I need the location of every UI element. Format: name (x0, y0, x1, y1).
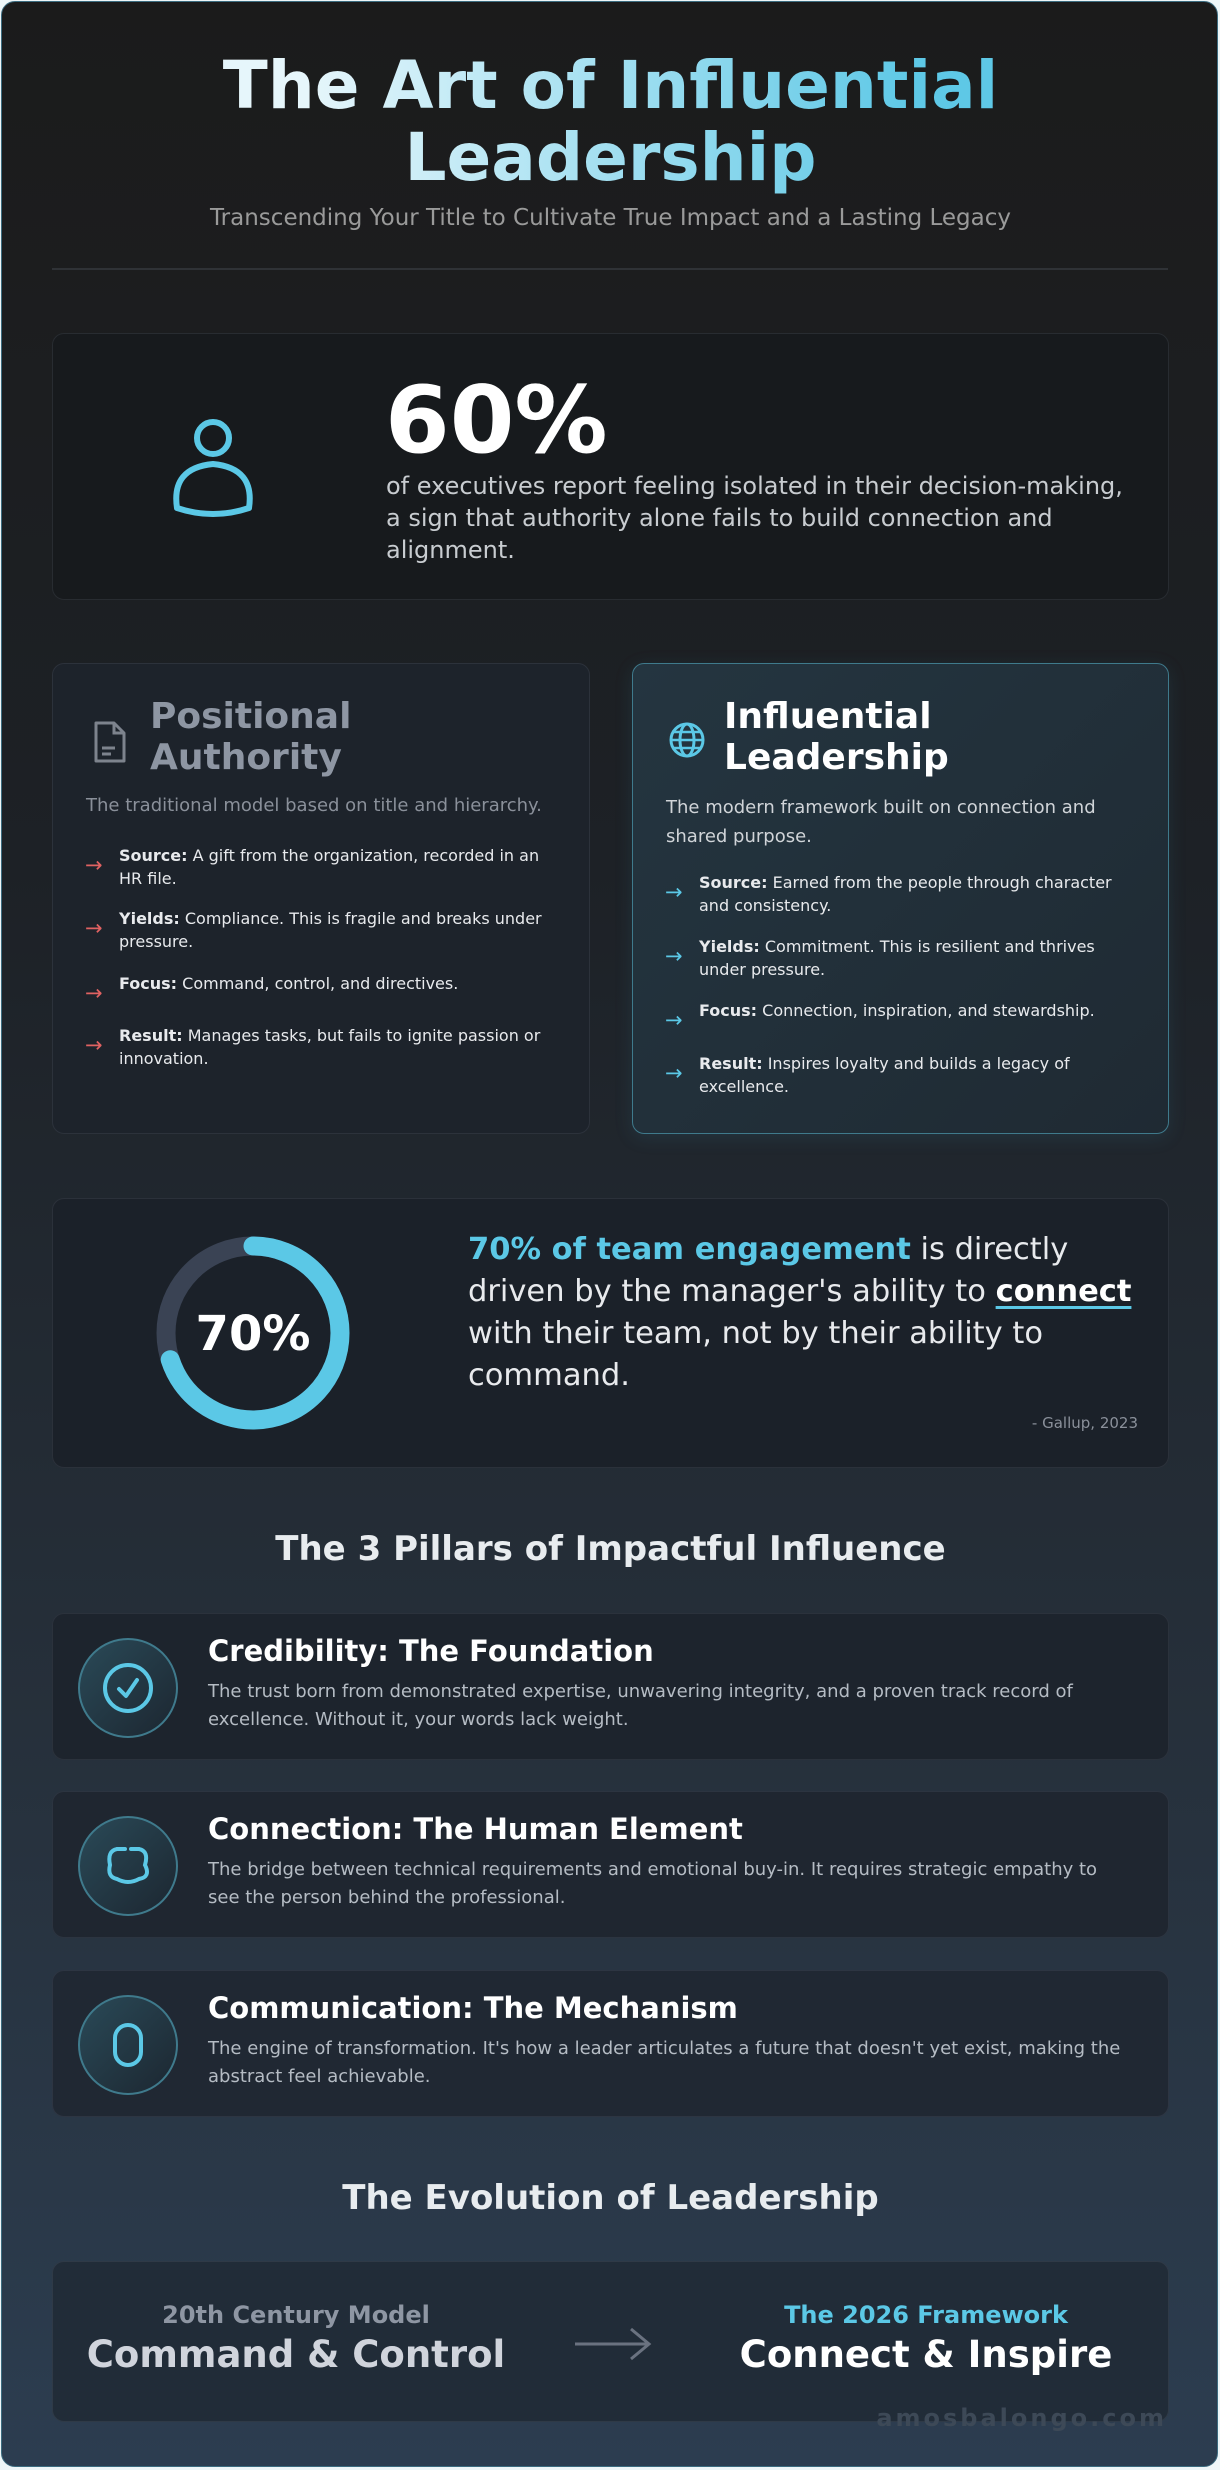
old model (87, 2301, 505, 2376)
bullet list: → (85, 981, 103, 1005)
bullet list: Source: Earned from the people through character and consistency. (699, 873, 1112, 915)
bullet list: Focus: Command, control, and directives. (119, 974, 458, 993)
icon: microphone (78, 1995, 178, 2095)
panel: influential leadership (632, 663, 1169, 1134)
icon: check (78, 1638, 178, 1738)
icon: globe (670, 722, 704, 758)
pillar: credibility (52, 1613, 1169, 1760)
pillar: connection (52, 1791, 1169, 1938)
bullet list: Result: Inspires loyalty and builds a legacy of excellence. (699, 1054, 1070, 1096)
bullet list (85, 846, 542, 1068)
pillar: communication (52, 1970, 1169, 2117)
description: The trust born from demonstrated expertise, unwavering integrity, and a proven track record of excellence. Without it, your words lack weight. (208, 1681, 1073, 1730)
heading: Authority (150, 737, 342, 778)
donut chart: 70% (196, 1306, 310, 1362)
title: The Art of Influential (223, 47, 998, 124)
bullet list: → (665, 1061, 683, 1085)
icon: person (173, 419, 253, 517)
new model (740, 2301, 1112, 2376)
stat description: of executives report feeling isolated in their decision-making, a sign that authority alone fails to build connection and alignment. (386, 472, 1123, 564)
title: Credibility: The Foundation (208, 1634, 654, 1668)
bullet list: → (665, 944, 683, 968)
stat card: 60% (52, 333, 1169, 600)
panel: positional authority (52, 663, 590, 1134)
bullet list: Source: A gift from the organization, recorded in an HR file. (119, 846, 539, 888)
description: The modern framework built on connection and shared purpose. (666, 797, 1096, 847)
stat number: 60% (385, 366, 608, 474)
heading: pillars: The 3 Pillars of Impactful Influence (275, 1529, 946, 1569)
bullet list: Yields: Commitment. This is resilient and thrives under pressure. (699, 937, 1095, 979)
icon: document (94, 722, 126, 762)
bullet list: → (85, 853, 103, 877)
subtitle: Transcending Your Title to Cultivate True Impact and a Lasting Legacy (210, 205, 1011, 231)
source: - Gallup, 2023 (1032, 1414, 1138, 1432)
bullet list: Result: Manages tasks, but fails to ignite passion or innovation. (119, 1026, 540, 1068)
bullet list (665, 873, 1112, 1096)
bullet list: → (85, 1033, 103, 1057)
watermark: amosbalongo.com (876, 2404, 1167, 2432)
quote text: 70% of team engagement is directly driven by the manager's ability to connect with their team, not by their ability to command. (468, 1232, 1131, 1393)
heading (724, 696, 949, 778)
description: The traditional model based on title and hierarchy. (86, 795, 542, 816)
title (2, 50, 1219, 194)
evolution card (52, 2261, 1169, 2422)
bullet list: → (665, 1008, 683, 1032)
new model: Connect & Inspire (740, 2333, 1112, 2376)
bullet list: → (665, 880, 683, 904)
heading: Influential (724, 696, 932, 737)
bullet list: → (85, 916, 103, 940)
heading (150, 696, 351, 778)
description: The engine of transformation. It's how a leader articulates a future that doesn't yet exist, making the abstract feel achievable. (208, 2038, 1120, 2087)
old model: Command & Control (87, 2333, 505, 2376)
arrow (575, 2328, 652, 2360)
icon: handshake (78, 1816, 178, 1916)
description: The bridge between technical requirements and emotional buy-in. It requires strategic empathy to see the person behind the professional. (208, 1859, 1097, 1908)
new model: The 2026 Framework (784, 2301, 1068, 2329)
title: Leadership (404, 119, 817, 196)
heading: Leadership (724, 737, 949, 778)
donut chart (156, 1236, 350, 1430)
stat card: 70% engagement (52, 1198, 1169, 1468)
title: Connection: The Human Element (208, 1812, 743, 1846)
heading: Positional (150, 696, 351, 737)
bullet list: Yields: Compliance. This is fragile and breaks under pressure. (119, 909, 542, 951)
bullet list: Focus: Connection, inspiration, and stewardship. (699, 1001, 1095, 1020)
old model: 20th Century Model (162, 2301, 430, 2329)
title: Communication: The Mechanism (208, 1991, 738, 2025)
heading: evolution: The Evolution of Leadership (342, 2178, 879, 2218)
